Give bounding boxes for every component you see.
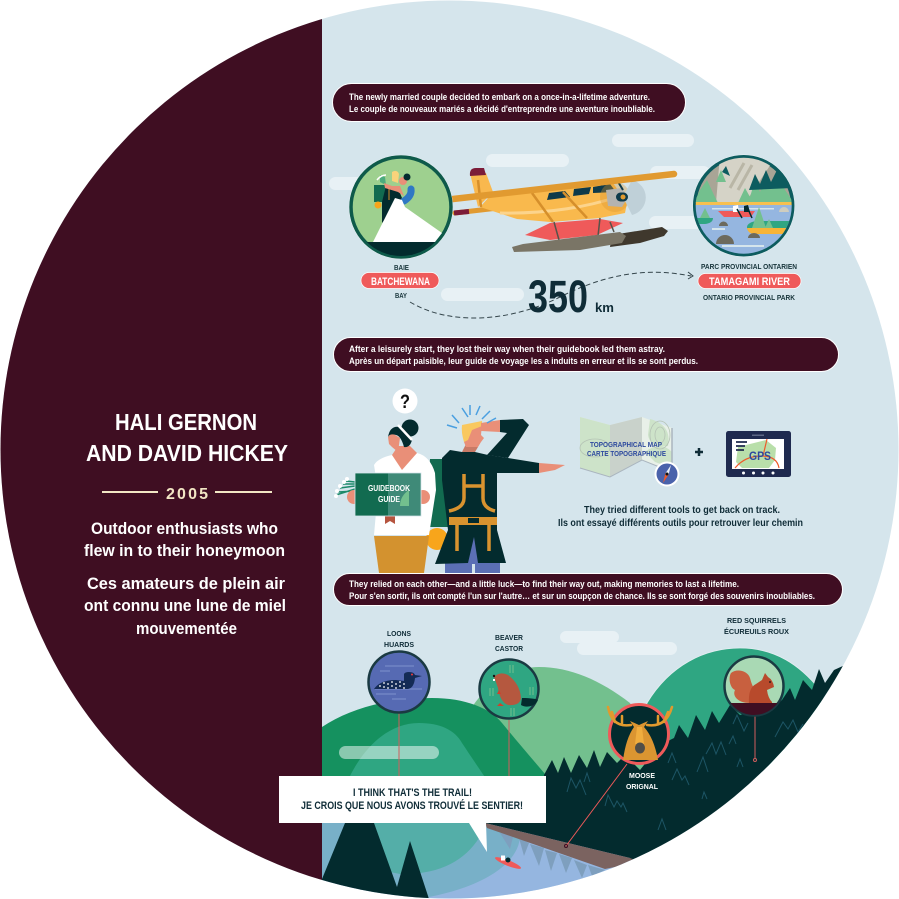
description: flew in to their honeymoon	[84, 541, 285, 560]
pin lines	[399, 713, 756, 848]
description	[84, 519, 286, 638]
name heading: HALI GERNON	[115, 409, 257, 435]
icon: river circle	[693, 155, 795, 257]
pill: intro text: Le couple de nouveaux mariés a décidé d'entreprendre une aventure inoubliable.	[349, 104, 655, 115]
landscape	[322, 648, 830, 899]
guidebook: GUIDEBOOK	[368, 484, 410, 493]
water reflections, log and left trees	[322, 823, 640, 899]
topographical map: CARTE TOPOGRAPHIQUE	[587, 449, 666, 458]
pill: intro text	[332, 84, 686, 122]
forest marks	[567, 715, 803, 830]
label: beaver	[495, 633, 524, 653]
pill: lost text: After a leisurely start, they lost their way when their guidebook led them astray.	[349, 344, 665, 355]
label: Batchewana: BATCHEWANA	[371, 276, 430, 288]
icon: loon	[368, 652, 430, 712]
figure: man pointing	[435, 405, 565, 573]
panel: left maroon	[0, 0, 322, 899]
icon: beaver	[480, 660, 538, 718]
pill: luck text	[334, 574, 842, 606]
label: beaver: BEAVER	[495, 633, 524, 642]
speech bubble	[279, 776, 546, 852]
label: loons	[384, 629, 414, 649]
distance: km	[595, 300, 614, 315]
label: Tamagami: TAMAGAMI RIVER	[709, 276, 790, 288]
description: Outdoor enthusiasts who	[91, 519, 278, 538]
description: Ces amateurs de plein air	[87, 574, 285, 593]
tools caption	[558, 504, 803, 529]
label: Batchewana: BAY	[395, 291, 407, 300]
label: Batchewana	[361, 263, 439, 300]
label: squirrels: RED SQUIRRELS	[727, 616, 786, 625]
figure: woman with guidebook	[334, 420, 449, 573]
name heading: AND DAVID HICKEY	[86, 440, 288, 466]
topographical map: TOPOGRAPHICAL MAP	[590, 440, 662, 449]
route arrow	[410, 272, 693, 318]
forest	[486, 666, 843, 860]
icon: question bubble	[392, 388, 418, 414]
label: Batchewana: BAIE	[394, 263, 409, 272]
label: squirrels: ÉCUREUILS ROUX	[724, 627, 789, 636]
label: Tamagami: ONTARIO PROVINCIAL PARK	[703, 293, 796, 302]
label: moose: MOOSE	[629, 771, 655, 780]
icon: couple circle	[349, 155, 453, 262]
icon: GPS device	[726, 431, 791, 477]
speech bubble: JE CROIS QUE NOUS AVONS TROUVÉ LE SENTIER!	[301, 799, 523, 812]
icon: compass	[654, 462, 680, 486]
label: squirrels	[724, 616, 789, 636]
guidebook: GUIDE	[378, 495, 401, 504]
guidebook	[355, 473, 421, 516]
icon: GPS device: GPS	[749, 449, 771, 463]
label: moose	[626, 771, 658, 791]
label: moose: ORIGNAL	[626, 782, 658, 791]
speech bubble: I THINK THAT'S THE TRAIL!	[353, 787, 472, 799]
plus sign	[695, 448, 703, 456]
icon: moose	[608, 704, 672, 764]
label: Tamagami: PARC PROVINCIAL ONTARIEN	[701, 262, 797, 271]
label: loons: HUARDS	[384, 640, 414, 649]
pill: lost text: Après un départ paisible, leur guide de voyage les a induits en erreur et ils se sont perdus.	[349, 356, 698, 367]
tools caption: Ils ont essayé différents outils pour retrouver leur chemin	[558, 517, 803, 529]
year divider: 2005	[166, 486, 208, 503]
pill: intro text: The newly married couple decided to embark on a once-in-a-lifetime adventure.	[349, 92, 650, 103]
pill: lost text	[334, 338, 838, 372]
name heading	[86, 414, 288, 461]
distance: 350	[528, 271, 588, 322]
description: mouvementée	[136, 619, 237, 638]
label: loons: LOONS	[387, 629, 411, 638]
label: Tamagami	[698, 262, 801, 302]
kayak	[494, 855, 522, 871]
icon: floatplane	[453, 168, 674, 252]
tools caption: They tried different tools to get back on track.	[584, 504, 780, 516]
pill: luck text: Pour s'en sortir, ils ont compté l'un sur l'autre… et sur un soupçon de chance. Ils se sont forgé des souvenirs inoubliables.	[349, 591, 815, 602]
icon: question bubble: ?	[400, 392, 410, 413]
pill: luck text: They relied on each other—and a little luck—to find their way out, making memories to last a lifetime.	[349, 579, 739, 590]
description: ont connu une lune de miel	[84, 596, 286, 615]
clouds	[329, 134, 710, 655]
icon: squirrel	[724, 656, 784, 717]
topographical map	[580, 417, 672, 477]
label: beaver: CASTOR	[495, 644, 524, 653]
